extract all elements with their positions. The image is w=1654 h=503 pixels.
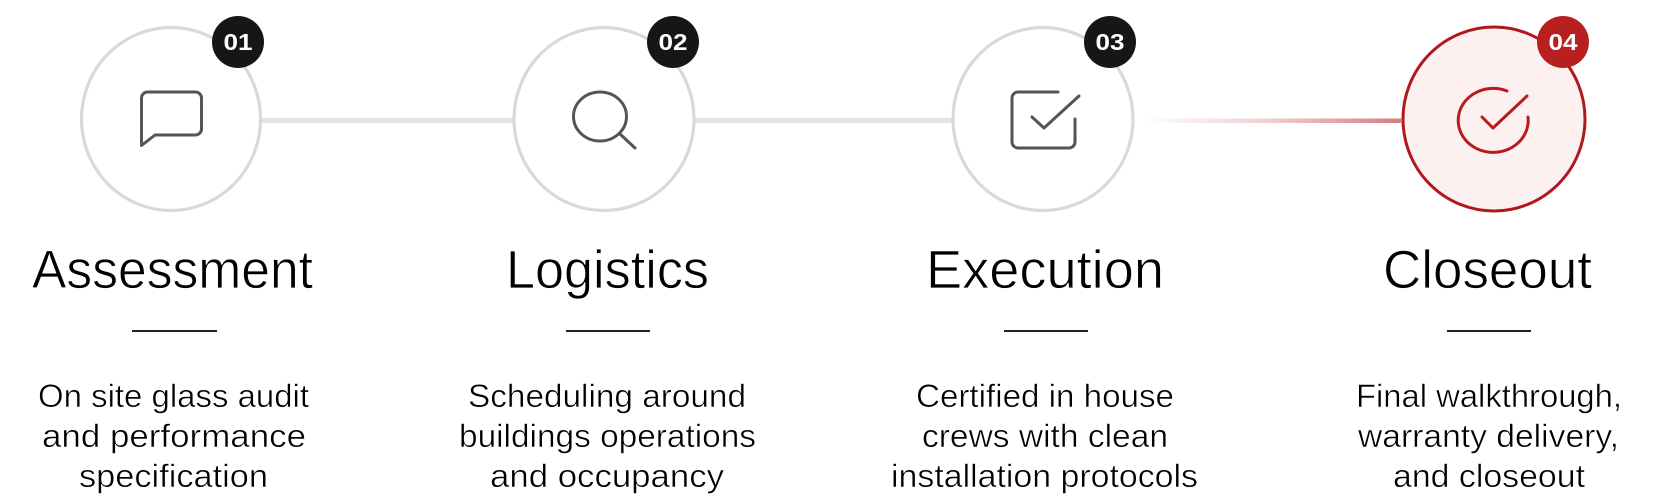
step 3: execution — [891, 16, 1198, 494]
circle — [1403, 27, 1585, 211]
description — [38, 378, 309, 494]
description: On site glass audit — [38, 378, 309, 414]
circle — [953, 28, 1133, 210]
description — [1356, 378, 1622, 494]
description: warranty delivery, — [1357, 418, 1619, 454]
divider — [1447, 330, 1531, 332]
icon: speech bubble — [142, 92, 202, 146]
connector: step 1 to 2 — [260, 118, 514, 123]
badge 03: 03 — [1096, 29, 1124, 55]
badge 01: 01 — [224, 29, 253, 55]
badge 04: 04 — [1548, 29, 1578, 55]
badge 04 — [1537, 16, 1589, 68]
badge 02 — [647, 16, 699, 68]
connector: step 3 to 4 — [1143, 118, 1401, 123]
description: and closeout — [1393, 458, 1585, 494]
description: specification — [79, 458, 268, 494]
description — [891, 378, 1198, 494]
divider — [132, 330, 217, 332]
description: Certified in house — [916, 378, 1174, 414]
icon: checkbox — [1012, 92, 1079, 148]
description — [459, 378, 756, 494]
description: Scheduling around — [468, 378, 746, 414]
badge 02: 02 — [658, 29, 688, 55]
heading: Execution — [926, 240, 1164, 300]
description: installation protocols — [891, 458, 1198, 494]
heading: Assessment — [32, 240, 313, 300]
heading: Closeout — [1383, 240, 1592, 300]
divider — [566, 330, 650, 332]
description: and occupancy — [490, 458, 724, 494]
step 2: logistics — [459, 16, 756, 494]
step 4: closeout — [1356, 16, 1622, 494]
step 1: assessment — [32, 16, 313, 494]
heading: Logistics — [506, 240, 709, 300]
icon: circled check — [1458, 88, 1528, 152]
circle — [514, 28, 694, 210]
badge 03 — [1084, 16, 1136, 68]
icon: magnifier — [574, 92, 635, 148]
circle — [82, 28, 260, 210]
description: crews with clean — [922, 418, 1168, 454]
description: Final walkthrough, — [1356, 378, 1622, 414]
badge 01 — [212, 16, 264, 68]
divider — [1004, 330, 1088, 332]
connector: step 2 to 3 — [694, 118, 952, 123]
description: and performance — [42, 418, 306, 454]
description: buildings operations — [459, 418, 756, 454]
